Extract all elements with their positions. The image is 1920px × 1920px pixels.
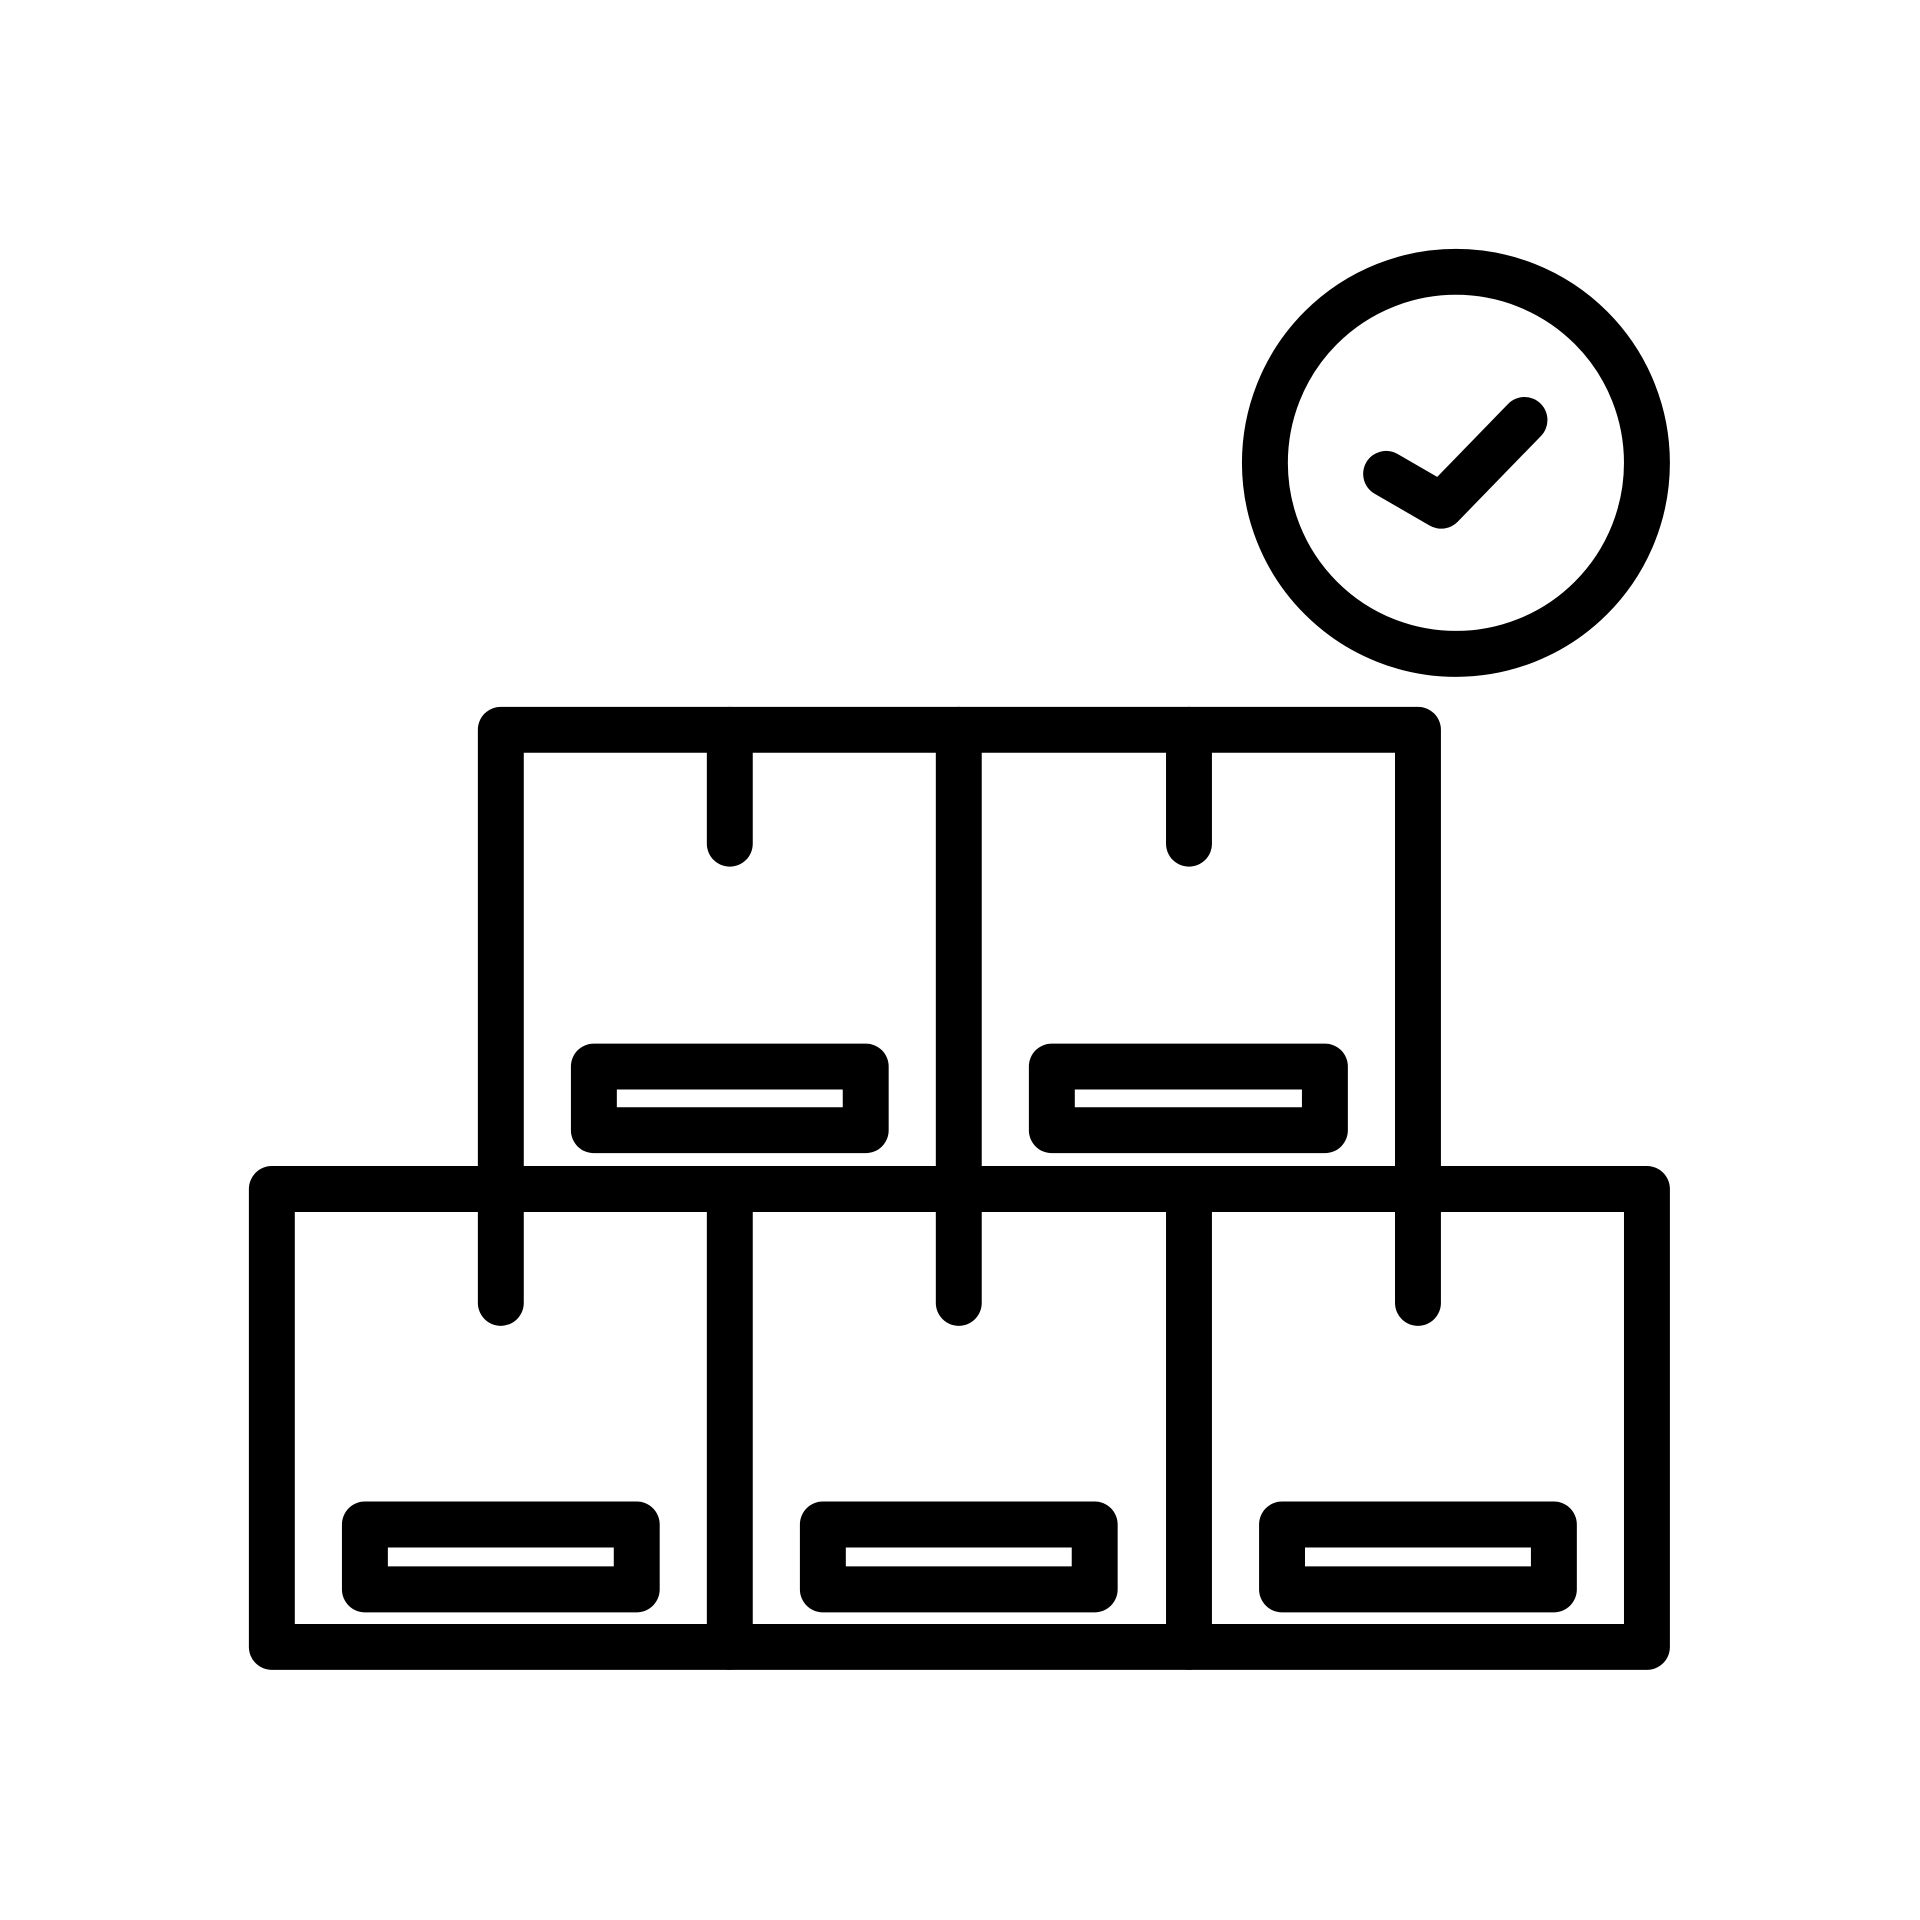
top row boxes [501,730,1418,1189]
bottom row boxes [272,1189,1647,1647]
icon: check circle [1265,272,1647,654]
